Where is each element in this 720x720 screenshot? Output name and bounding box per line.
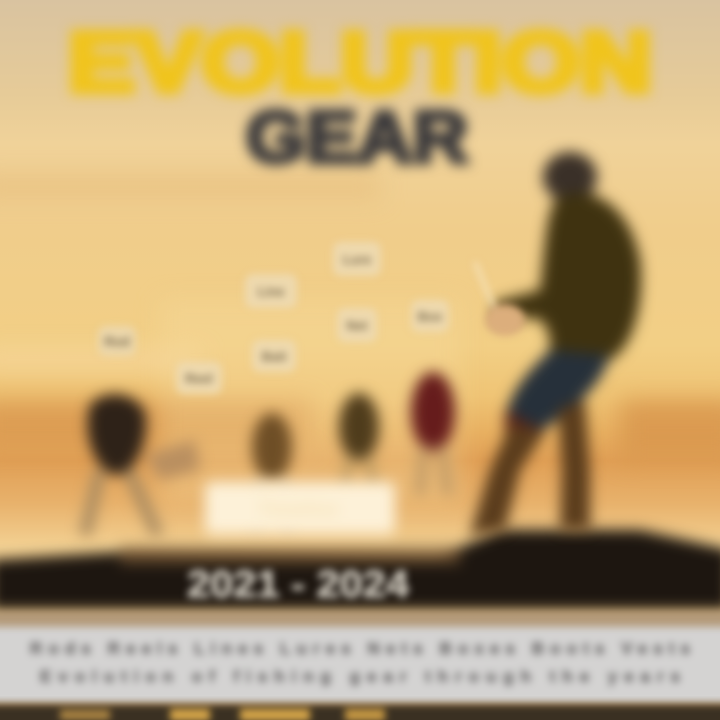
footer text: Evolution of fishing gear through the years [40,667,680,686]
evolution figures [85,372,455,535]
fishing rod and hands [475,262,525,336]
years on shoreline: 2021 - 2024 [187,564,409,606]
label 6 [337,308,377,342]
fisherman legs [470,400,590,535]
label 5: Lure [343,252,371,267]
fisherman silhouette [470,152,641,535]
figure 1: dark [85,394,200,535]
footer text [30,639,690,686]
central white caption block [205,482,395,534]
label 4 [252,340,296,372]
label 2: Reel [185,371,213,386]
gear labels [98,242,449,394]
label 4: Bait [262,349,287,364]
figure 2: brown [252,413,292,530]
footer text: Rods Reels Lines Lures Nets Boxes Boots Vests [30,639,690,658]
label 7 [411,300,449,332]
dark shoreline band [0,530,720,610]
label 1: Rod [104,334,130,349]
fisherman shorts [505,350,610,432]
label 2 [176,362,222,394]
figure 3: olive [339,393,379,490]
fisherman head [543,152,597,202]
figure 4: red [411,372,455,495]
label 6: Net [347,318,368,333]
label 5 [333,242,381,276]
label 3: Line [258,284,284,299]
fisherman torso [495,193,641,362]
footer band [0,612,720,704]
fisherman red-brown lower leg [505,410,545,450]
label 1 [98,326,136,356]
label 3 [245,274,297,308]
central white caption block: Timeline [258,499,338,521]
title: EVOLUTION: EVOLUTION [68,15,652,109]
label 7: Box [418,309,443,324]
subtitle: GEAR: GEAR [246,98,468,178]
bottom strip [0,704,720,720]
